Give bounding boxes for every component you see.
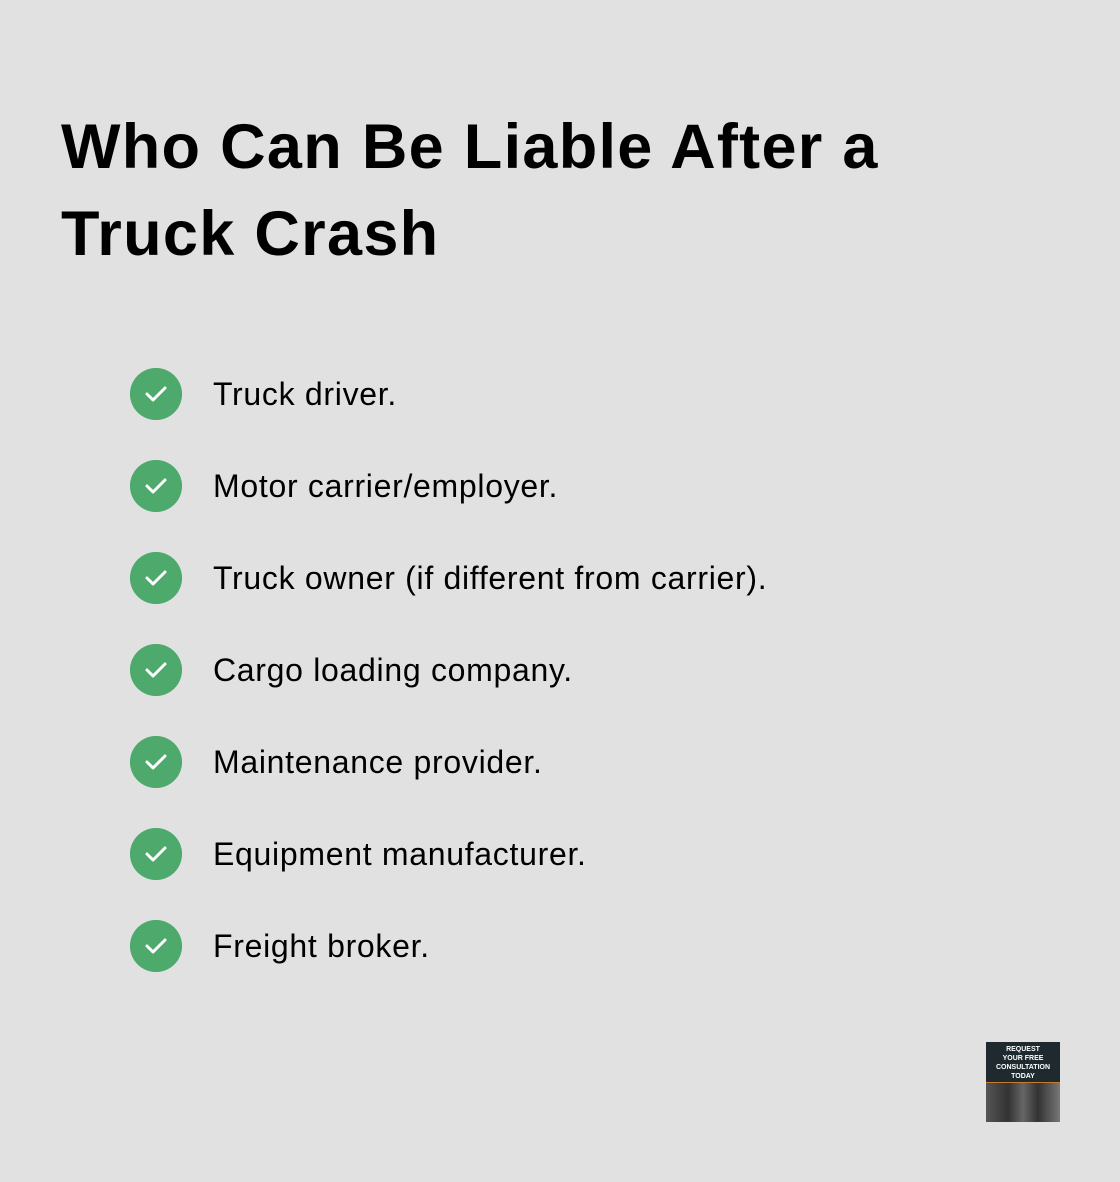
icon: check <box>130 736 182 788</box>
title <box>61 112 879 269</box>
item: motor carrier <box>130 460 558 512</box>
item: freight broker: Freight broker. <box>213 928 430 964</box>
item: truck owner: Truck owner (if different from carrier). <box>213 560 767 596</box>
logo: consultation badge: TODAY <box>1011 1073 1035 1080</box>
item: cargo loading <box>130 644 573 696</box>
item: equipment manufacturer: Equipment manufacturer. <box>213 836 587 872</box>
icon: check <box>130 828 182 880</box>
item: truck driver: Truck driver. <box>213 376 397 412</box>
icon: check <box>130 920 182 972</box>
item: maintenance <box>130 736 543 788</box>
item: truck driver <box>130 368 397 420</box>
logo: consultation badge <box>986 1042 1060 1122</box>
item: freight broker <box>130 920 430 972</box>
logo: consultation badge: YOUR FREE <box>1003 1055 1043 1062</box>
title: Truck Crash <box>61 199 439 269</box>
item: motor carrier: Motor carrier/employer. <box>213 468 558 504</box>
logo: consultation badge: REQUEST <box>1006 1046 1040 1053</box>
title: Who Can Be Liable After a <box>61 112 879 182</box>
item: truck owner <box>130 552 767 604</box>
icon: check <box>130 644 182 696</box>
logo: consultation badge: CONSULTATION <box>996 1064 1050 1071</box>
icon: check <box>130 368 182 420</box>
item: cargo loading: Cargo loading company. <box>213 652 573 688</box>
item: maintenance: Maintenance provider. <box>213 744 543 780</box>
icon: check <box>130 552 182 604</box>
item: equipment manufacturer <box>130 828 587 880</box>
icon: check <box>130 460 182 512</box>
